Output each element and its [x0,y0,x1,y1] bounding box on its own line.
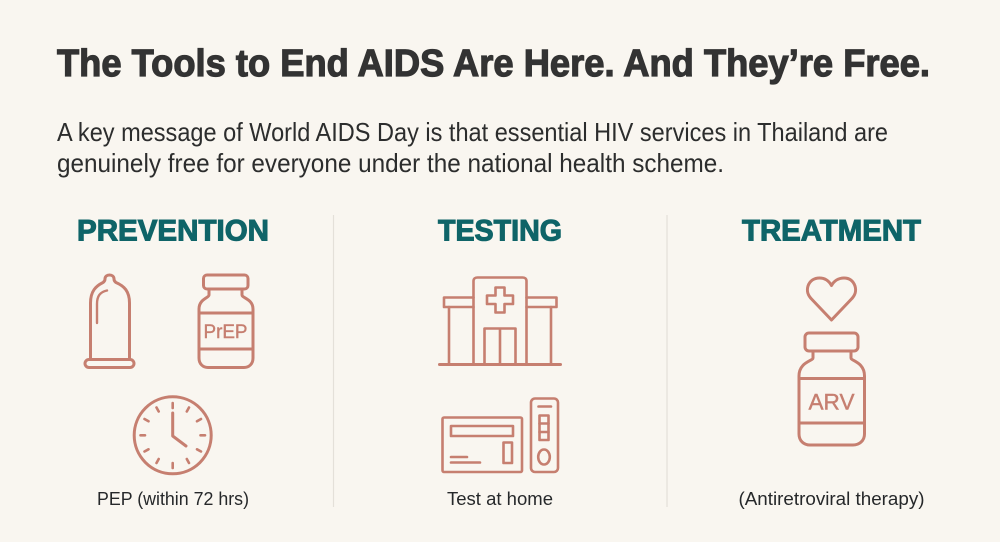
title: The Tools to End AIDS Are Here. And They’re Free. [57,43,930,85]
caption: test at home: Test at home [447,489,553,509]
icon: ARV bottle: ARV [808,390,855,414]
icon: PrEP bottle [199,275,253,368]
panel: prevention [77,214,269,509]
caption: PEP: PEP (within 72 hrs) [97,489,249,509]
panel: treatment [738,214,924,509]
icon: ARV bottle [799,333,864,445]
intro text [57,117,888,178]
icon: test kit [442,398,558,472]
caption: antiretroviral therapy: (Antiretroviral therapy) [738,489,924,509]
intro text: A key message of World AIDS Day is that essential HIV services in Thailand are [57,117,888,147]
icon: condom [85,275,134,368]
icon: clock [134,397,211,474]
icon: heart [807,278,856,320]
icon: PrEP bottle: PrEP [204,322,248,343]
heading: treatment: TREATMENT [742,214,921,248]
panel: testing [438,214,562,509]
heading: testing: TESTING [438,214,562,248]
heading: prevention: PREVENTION [77,214,269,248]
icon: hospital [440,278,560,364]
intro text: genuinely free for everyone under the national health scheme. [57,148,724,178]
